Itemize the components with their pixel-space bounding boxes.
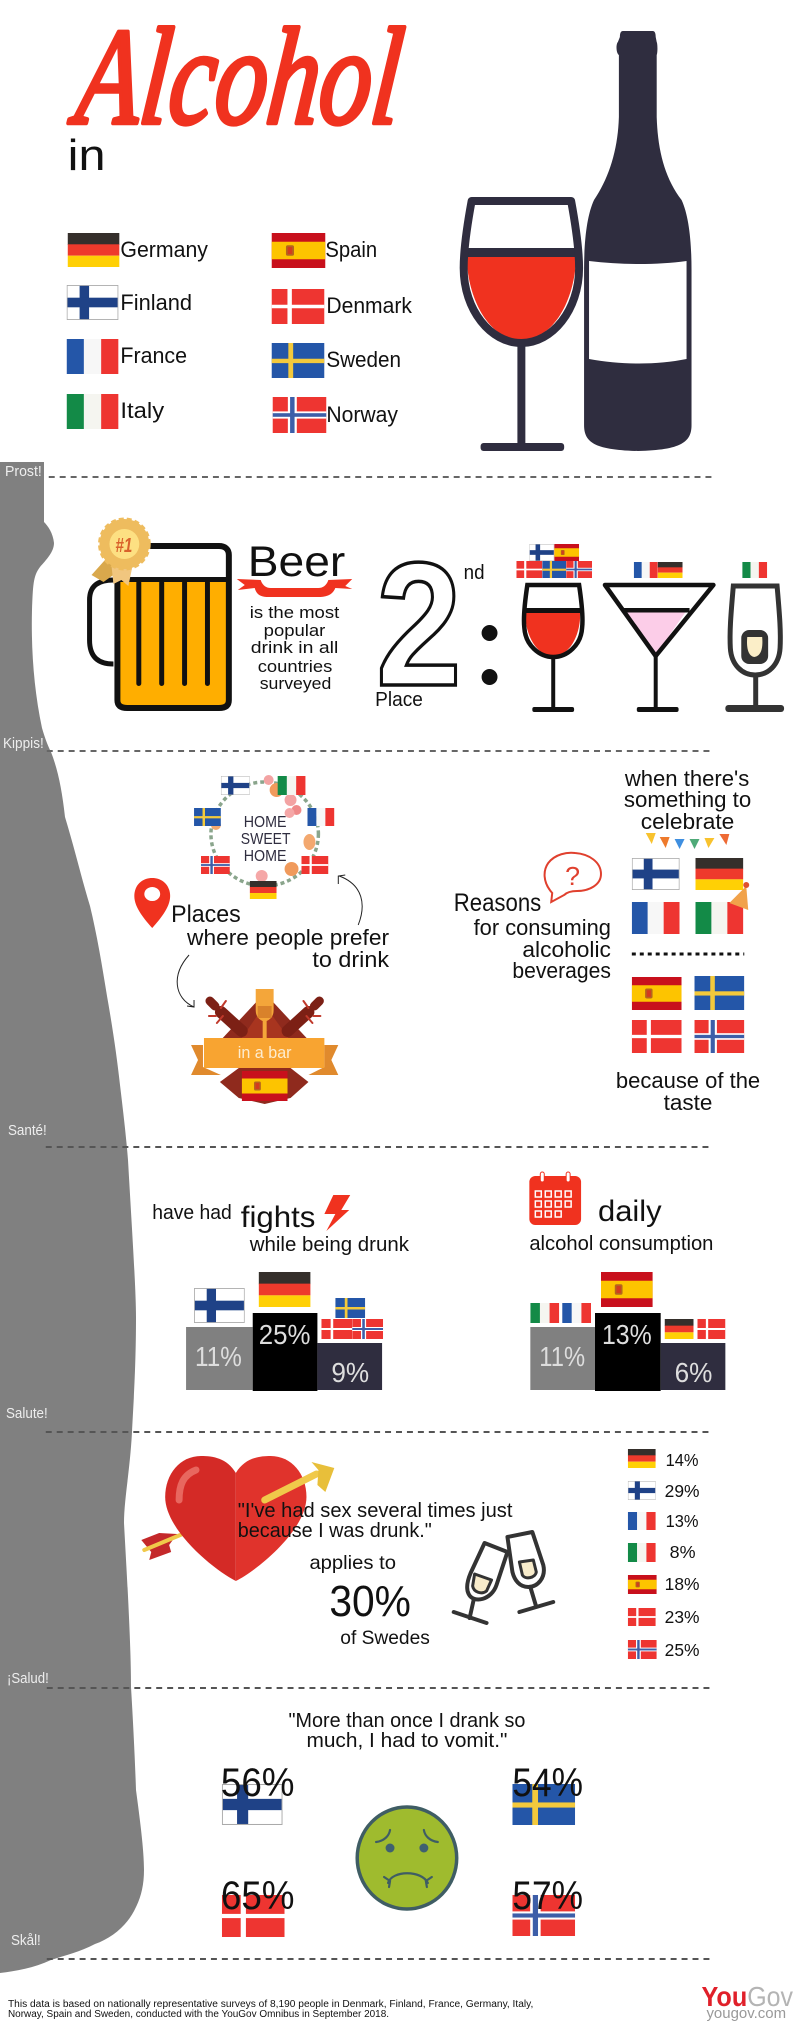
quote: vomit: much, I had to vomit." [306,1730,507,1752]
flag above flute: Italy [742,562,767,578]
colon [482,625,498,685]
percent list by country: 29% [665,1481,700,1501]
section label: Kippis!: Kippis! [3,735,44,752]
percent list by country: 14% [666,1450,699,1470]
stat: Denmark 65%: 65% [221,1874,295,1918]
quote: sex several times [238,1500,513,1542]
text: reasons for consuming alcoholic beverages: for consuming [474,915,611,940]
icon: large wine glass [464,201,579,451]
quote: vomit: "More than once I drank so [289,1710,525,1732]
subtitle: in: in [68,131,105,180]
quote: sex several times: "I've had sex several times just [238,1500,513,1522]
bar chart: daily consumption [530,1272,725,1391]
icon: sick face [357,1807,457,1909]
text: places where people prefer to drink [171,901,389,972]
stat: Sweden 54%: 54% [512,1761,583,1805]
country legend: Germany [120,237,208,262]
text: beer is the most popular drink: countries [258,657,332,676]
big number: 2nd place: nd [464,562,485,584]
text: beer is the most popular drink [250,603,340,693]
stat: applies to 30% of Swedes: applies to [309,1553,396,1574]
icon: in a bar badge: in a bar [238,1043,292,1062]
section label: Prost!: Prost! [5,463,42,480]
arrow: to home [338,875,362,925]
text: when there's something to celebrate: something to [624,787,751,812]
bar chart: fights: 25% [259,1319,310,1350]
heading: fights: while being drunk [249,1234,409,1256]
big number: 2nd place: Place [375,689,423,711]
icon: speech bubble question: ? [565,863,580,891]
text: beer is the most popular drink: surveyed [260,674,331,693]
bar chart: fights [186,1272,383,1391]
text: reasons for consuming alcoholic beverages: beverages [512,958,611,983]
footer note [8,1999,533,2020]
country legend: Italy [120,398,164,423]
logo: YouGov: yougov.com [706,2005,786,2022]
section label: Salute!: Salute! [6,1405,48,1422]
heading: Beer: Beer [248,538,345,586]
bar chart: fights: 9% [331,1357,369,1388]
stat: Sweden 54% [512,1761,583,1825]
icon: party hat [729,882,749,910]
country legend: Norway [326,402,398,427]
stat: Denmark 65% [221,1874,295,1937]
icon: home wreath [211,775,318,886]
heading: fights [152,1201,409,1256]
bar chart: fights: 11% [195,1341,242,1372]
percent list by country: 25% [665,1640,700,1660]
icon: home wreath: SWEET [241,831,291,848]
bar chart: daily consumption: 11% [539,1341,585,1372]
country legend: Sweden [326,347,401,372]
heading: fights: fights [241,1201,315,1234]
icon: heart with arrow [141,1456,334,1581]
stat: Finland 56%: 56% [221,1761,295,1805]
icon: home wreath: HOME [244,814,287,831]
heading: daily alcohol consumption: daily [598,1195,662,1228]
icon: red wine glass [523,585,582,712]
flags above cocktail: France Germany [634,562,683,578]
flags: celebrate countries [632,858,743,934]
text: reasons for consuming alcoholic beverages: alcoholic [522,937,611,962]
section label: ¡Salud!: ¡Salud! [7,1670,49,1687]
stat: Norway 57% [512,1874,583,1936]
icon: red ribbon [237,579,352,597]
bar chart: daily consumption: 13% [602,1319,652,1350]
flags above wine: Finland Spain Denmark Sweden Norway [516,544,592,578]
section label: Santé!: Santé! [8,1122,47,1139]
stat: applies to 30% of Swedes [309,1553,430,1649]
percent list by country: 13% [666,1511,699,1531]
stat: applies to 30% of Swedes: 30% [329,1577,411,1626]
text: reasons for consuming alcoholic beverages [454,889,611,983]
percent list by country: 18% [665,1574,700,1594]
icon: clinking glasses [454,1532,553,1623]
footer note: This data is based on nationally representative surveys of 8,190 people in Denmark, Finland, France, Germany, Italy, [8,1999,533,2010]
text: because of the taste: taste [664,1090,712,1115]
text: because of the taste: because of the [616,1068,760,1093]
gray bottle silhouette [0,462,144,1973]
icon: lightning bolt [324,1195,350,1231]
stat: Finland 56% [221,1761,295,1824]
quote: sex several times: because I was drunk." [238,1520,432,1542]
heading: fights: have had [152,1202,232,1224]
icon: in a bar badge [191,989,338,1104]
country legend: Finland [120,290,192,315]
flags: taste countries [632,976,744,1053]
country legend [67,233,412,433]
text: when there's something to celebrate: celebrate [641,809,734,834]
big number: 2nd place: 2 [376,527,462,723]
footer note: Norway, Spain and Sweden, conducted with the YouGov Omnibus in September 2018. [8,2009,389,2020]
text: when there's something to celebrate [624,766,751,834]
quote: vomit [289,1710,525,1752]
icon: #1 medal: #1 [115,535,132,557]
arrow: to bar [177,955,194,1007]
icon: home wreath: HOME [244,848,287,865]
stat: Norway 57%: 57% [512,1874,583,1918]
icon: #1 medal [92,519,149,586]
country legend: Denmark [326,293,412,318]
icon: wine bottle [584,31,692,451]
bar chart: daily consumption: 6% [675,1357,712,1388]
text: when there's something to celebrate: when there's [624,766,749,791]
icon: champagne flute [725,586,784,712]
icon: cocktail glass [605,585,713,712]
text: because of the taste [616,1068,760,1115]
wreath flags [194,776,334,899]
logo: YouGov: Gov [747,1981,793,2012]
text: places where people prefer to drink: Places [171,901,241,928]
country legend: France [120,343,187,368]
text: beer is the most popular drink: popular [264,621,326,640]
icon: speech bubble question [545,853,601,902]
text: reasons for consuming alcoholic beverages: Reasons [454,889,541,917]
text: beer is the most popular drink: drink in all [251,638,338,657]
section label: Skål!: Skål! [11,1932,41,1949]
logo: YouGov [701,1981,793,2022]
title: Alcohol: Alcohol [64,0,410,153]
country legend: Spain [325,237,377,262]
text: places where people prefer to drink: where people prefer [186,925,389,950]
icon: bunting [646,833,729,849]
percent list by country [628,1449,700,1660]
logo: YouGov: You [701,1981,747,2012]
icon: map pin [134,878,170,928]
heading: daily alcohol consumption [529,1195,713,1255]
icon: beer mug [90,546,229,708]
text: places where people prefer to drink: to drink [312,947,389,972]
percent list by country: 23% [665,1607,700,1627]
heading: daily alcohol consumption: alcohol consumption [529,1233,713,1255]
percent list by country: 8% [670,1542,696,1562]
text: beer is the most popular drink: is the most [250,603,340,622]
icon: calendar [529,1172,581,1225]
stat: applies to 30% of Swedes: of Swedes [340,1628,430,1649]
